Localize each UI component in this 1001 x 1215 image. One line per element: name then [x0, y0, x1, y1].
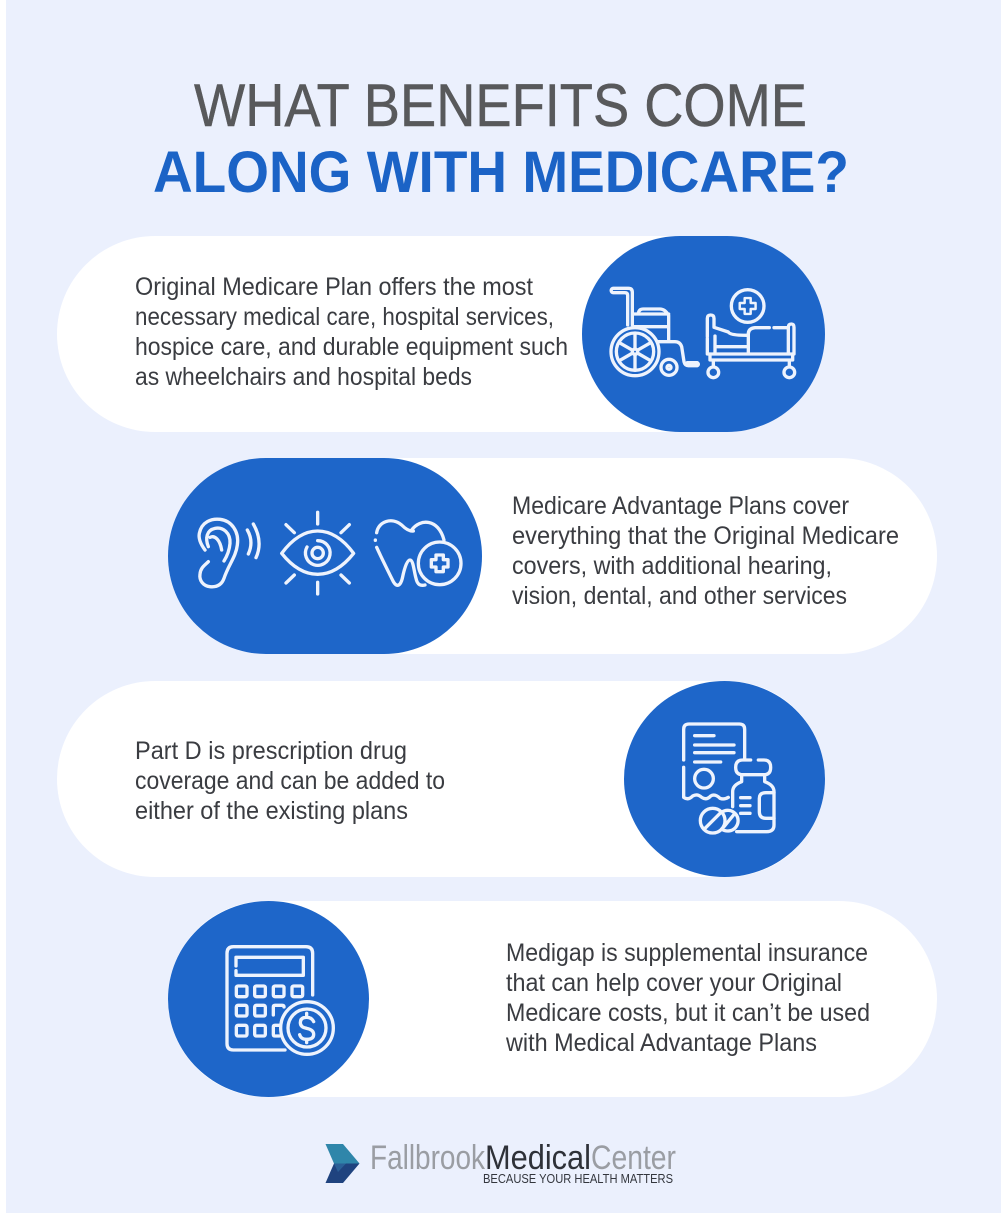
icon: calculator and dollar coin — [168, 901, 369, 1097]
text: original medicare description: as wheelchairs and hospital beds — [135, 363, 472, 391]
text: original medicare description — [135, 273, 568, 391]
icon: logo chevron — [326, 1144, 360, 1183]
title: ALONG WITH MEDICARE? — [153, 140, 849, 205]
text: medicare advantage description: covers, with additional hearing, — [512, 552, 832, 580]
text: medigap description: Medicare costs, but it can’t be used — [506, 999, 870, 1027]
text: part d description: either of the existing plans — [135, 797, 408, 825]
text: part d description: Part D is prescription drug — [135, 737, 407, 765]
text: medigap description — [505, 939, 870, 1057]
icon: wheelchair and hospital bed — [582, 236, 825, 432]
text: part d description — [135, 737, 445, 825]
icon: prescription and pill bottle — [624, 681, 825, 877]
text: medigap description: Medigap is supplemental insurance — [506, 939, 868, 967]
text: logo tagline: BECAUSE YOUR HEALTH MATTERS — [483, 1171, 673, 1186]
text: medigap description: with Medical Advantage Plans — [505, 1029, 817, 1057]
text: logo wordmark: Center — [591, 1139, 676, 1177]
text: medicare advantage description — [512, 492, 899, 610]
text: original medicare description: hospice care, and durable equipment such — [135, 333, 568, 361]
panel: part d — [57, 681, 825, 877]
title: WHAT BENEFITS COME — [194, 72, 807, 139]
text: medicare advantage description: everything that the Original Medicare — [512, 522, 899, 550]
icon: ear, eye and tooth — [168, 458, 482, 654]
panel: medicare advantage plans — [168, 458, 937, 654]
text: logo wordmark: Fallbrook — [370, 1139, 486, 1177]
text: logo wordmark: Medical — [485, 1139, 591, 1177]
logo — [326, 1139, 676, 1186]
text: medicare advantage description: Medicare Advantage Plans cover — [512, 492, 849, 520]
panel: original medicare plan — [57, 236, 825, 432]
text: original medicare description: necessary medical care, hospital services, — [135, 303, 554, 331]
panel: medigap — [168, 901, 937, 1097]
text: medigap description: that can help cover your Original — [506, 969, 842, 997]
text: medicare advantage description: vision, dental, and other services — [512, 582, 847, 610]
text: original medicare description: Original Medicare Plan offers the most — [135, 273, 533, 301]
text: part d description: coverage and can be added to — [135, 767, 445, 795]
title — [153, 72, 849, 205]
